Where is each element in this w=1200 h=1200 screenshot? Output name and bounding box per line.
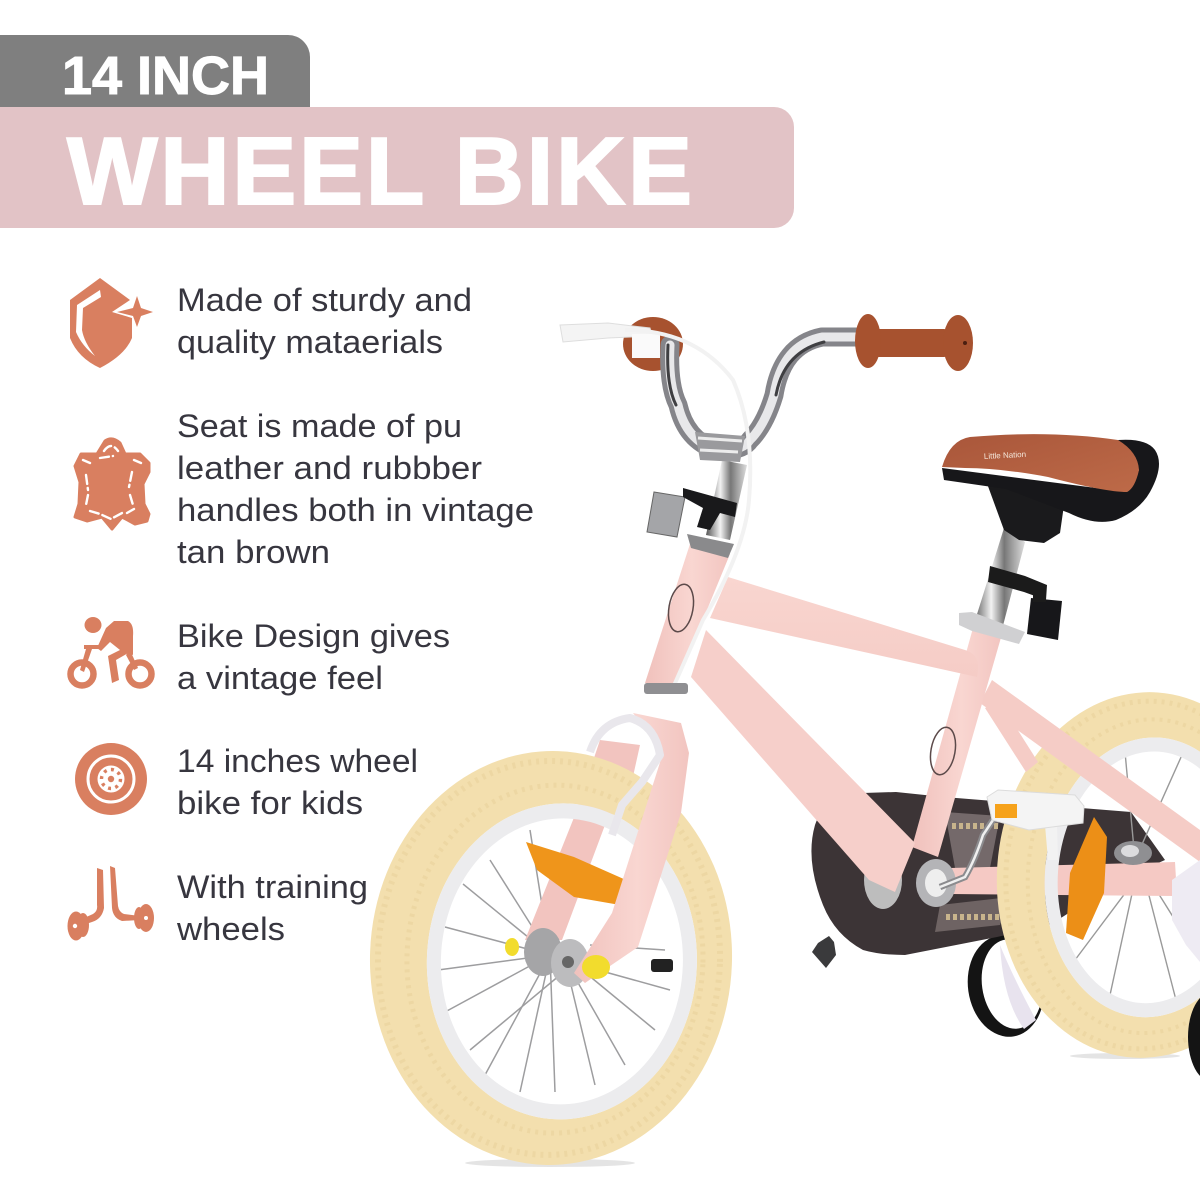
title banner: 14 INCH: 14 INCH (62, 46, 269, 106)
bottom bracket (916, 820, 993, 907)
left grip (623, 317, 683, 371)
text: sturdy materials: Made of sturdy and (177, 282, 472, 318)
text: vintage feel: a vintage feel (177, 660, 383, 696)
stem (687, 432, 747, 558)
rear tire and rim (985, 682, 1200, 1068)
text: 14 inch wheel: bike for kids (177, 785, 363, 821)
text: sturdy materials: quality mataerials (177, 324, 443, 360)
frame logo (665, 582, 959, 777)
ground shadows (465, 1053, 1180, 1167)
down tube (691, 630, 915, 892)
front tire and rim (363, 745, 739, 1171)
brake caliper (590, 718, 660, 835)
crown clamp (644, 683, 688, 694)
rear wheel spokes (1075, 752, 1200, 1000)
front training wheel edge (1188, 992, 1200, 1082)
seat stays (980, 680, 1200, 862)
brake cable (625, 330, 750, 690)
pedal (987, 790, 1084, 860)
yellow axle caps (505, 938, 610, 979)
rear reflector (1066, 817, 1107, 940)
chain guard (811, 792, 1165, 955)
icon: cyclist (70, 617, 152, 686)
handlebar reflector and clamp (647, 488, 737, 537)
icon: wheel (75, 743, 147, 815)
icon: training wheels (68, 866, 154, 940)
text: training wheels: wheels (176, 911, 285, 947)
seat: Little Nation (984, 450, 1026, 461)
text: seat and handles: handles both in vintage (177, 492, 534, 528)
brake lever (560, 323, 660, 358)
icon: shield with sparkle (70, 278, 153, 368)
head tube (645, 544, 730, 690)
right grip (855, 314, 973, 371)
handlebar (668, 337, 860, 450)
seat post (959, 528, 1062, 644)
icon: leather hide (75, 439, 149, 529)
training wheel bracket (1172, 860, 1200, 962)
text: vintage feel: Bike Design gives (177, 618, 450, 654)
axle nut (651, 959, 673, 972)
seat (942, 434, 1159, 543)
title banner: 14 INCH (0, 35, 310, 107)
text: seat and handles: tan brown (177, 534, 330, 570)
title banner: WHEEL BIKE (0, 107, 794, 228)
text: seat and handles: Seat is made of pu (177, 408, 462, 444)
rear hub (1114, 841, 1152, 865)
top tube (710, 577, 978, 677)
rear chain stay (950, 862, 1177, 896)
front wheel spokes (438, 830, 670, 1092)
title banner: WHEEL BIKE: WHEEL BIKE (67, 118, 692, 225)
kickstand foot (812, 936, 836, 968)
near fork blade (574, 713, 689, 983)
feature list (68, 278, 534, 947)
seat tube (912, 628, 1002, 857)
front reflector (526, 842, 626, 905)
text: 14 inch wheel: 14 inches wheel (177, 743, 418, 779)
rear training wheel (961, 930, 1051, 1042)
back fork blade (525, 740, 640, 940)
text: seat and handles: leather and rubbber (177, 450, 482, 486)
front hub (524, 928, 589, 987)
bike illustration (363, 314, 1200, 1171)
text: training wheels: With training (177, 869, 368, 905)
